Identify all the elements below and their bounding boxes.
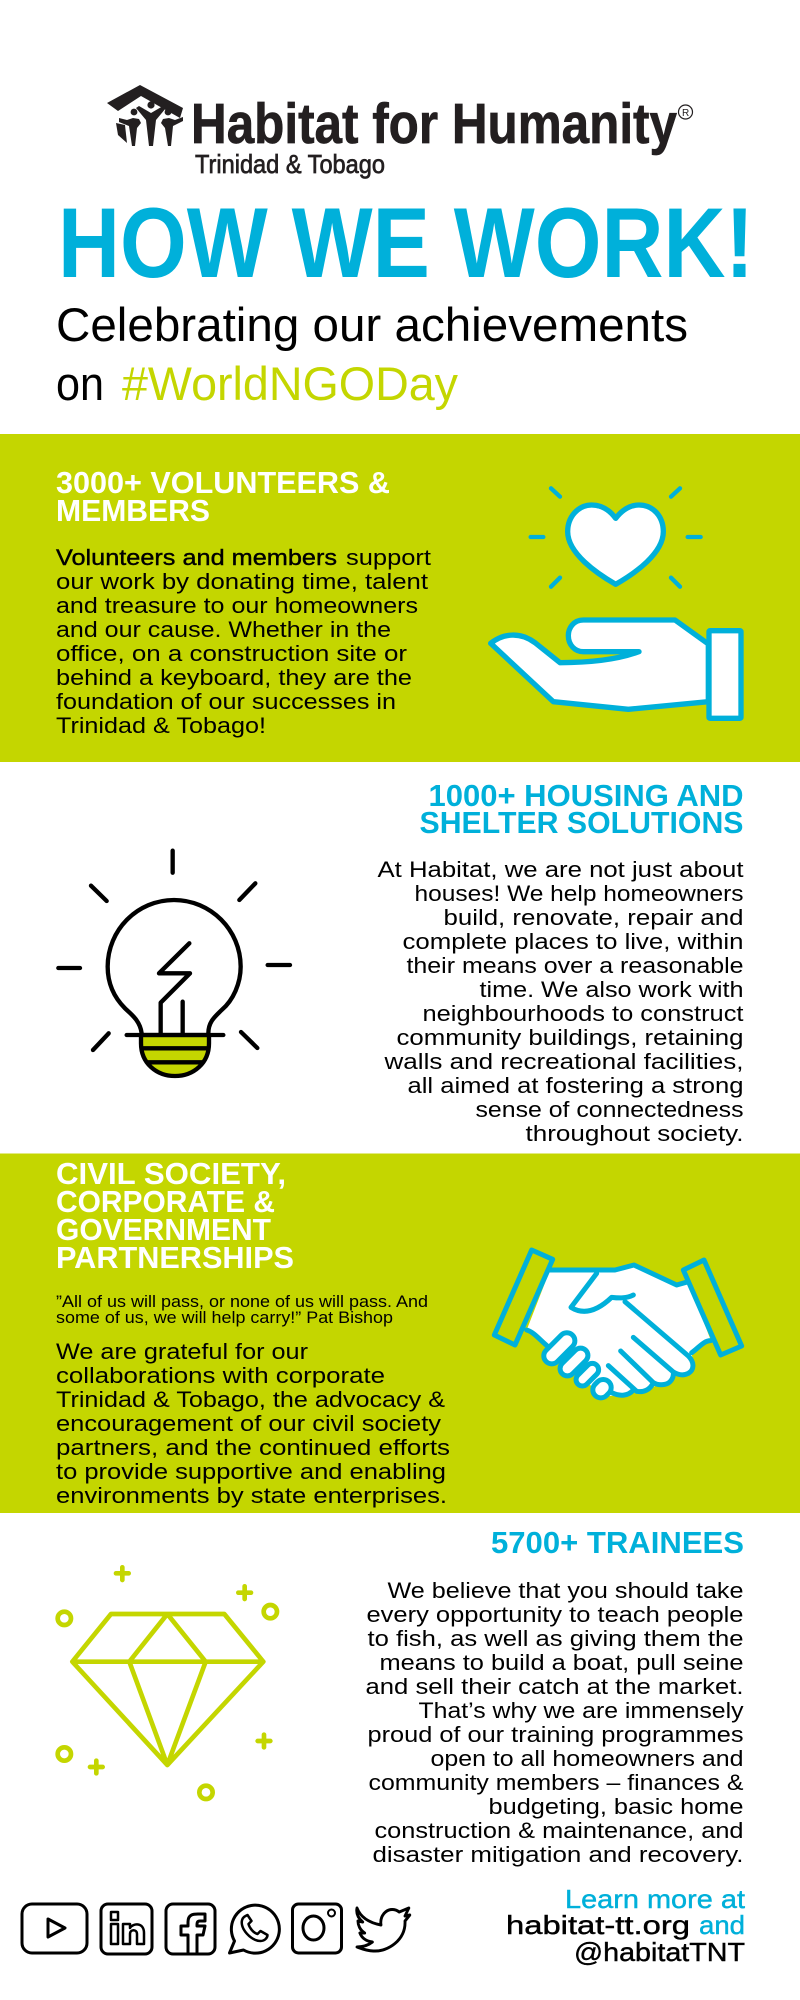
text block: trainees: every opportunity to teach people — [366, 1602, 744, 1627]
call to action: Learn more at — [565, 1884, 746, 1914]
heading: volunteers: MEMBERS — [56, 494, 210, 528]
text block: trainees: open to all homeowners and — [430, 1746, 744, 1771]
text block: partnerships: We are grateful for our — [56, 1339, 309, 1364]
icon: instagram — [292, 1904, 342, 1953]
heading: partnerships: PARTNERSHIPS — [56, 1241, 294, 1275]
icon: handshake — [494, 1250, 742, 1401]
heading: partnerships: CORPORATE & — [56, 1185, 275, 1219]
text block: volunteers: our work by donating time, talent — [56, 569, 429, 594]
text block: trainees: to fish, as well as giving them the — [368, 1626, 744, 1651]
icon: whatsapp — [230, 1905, 279, 1953]
text block: trainees: We believe that you should take — [388, 1578, 744, 1603]
text block: volunteers: foundation of our successes in — [56, 689, 396, 714]
text block: trainees: That’s why we are immensely — [418, 1698, 744, 1723]
text block: housing: neighbourhoods to construct — [422, 1001, 744, 1026]
text block: trainees: construction & maintenance, and — [374, 1818, 744, 1843]
call to action: and — [699, 1910, 745, 1940]
text block: volunteers: and our cause. Whether in the — [56, 617, 391, 642]
heading: housing — [420, 779, 744, 840]
panel: volunteers — [0, 434, 800, 762]
text block: housing: their means over a reasonable — [406, 953, 744, 978]
subtitle — [56, 298, 688, 410]
icon: facebook — [166, 1904, 215, 1954]
text block: housing: all aimed at fostering a strong — [408, 1073, 744, 1098]
text block: trainees: disaster mitigation and recovery. — [372, 1842, 744, 1867]
text block: partnerships: to provide supportive and enabling — [56, 1459, 446, 1484]
logo: Habitat for Humanity Trinidad & Tobago: R — [682, 108, 689, 119]
logo: Habitat for Humanity Trinidad & Tobago — [107, 85, 692, 179]
text block: partnerships: collaborations with corporate — [56, 1363, 385, 1388]
logo: Habitat for Humanity Trinidad & Tobago: Habitat for Humanity — [191, 92, 677, 156]
text block: housing: sense of connectedness — [476, 1097, 744, 1122]
text block: trainees: community members – finances & — [368, 1770, 744, 1795]
quote: some of us, we will help carry!” Pat Bishop — [56, 1308, 393, 1327]
panel: partnerships — [0, 1154, 800, 1513]
text block: volunteers: support — [346, 545, 432, 570]
text block: housing: throughout society. — [526, 1121, 744, 1146]
heading: partnerships — [56, 1157, 294, 1275]
icon: light bulb — [58, 851, 290, 1076]
text block: housing: At Habitat, we are not just about — [378, 857, 744, 882]
icon: house and people — [107, 85, 183, 146]
icon: diamond — [58, 1567, 277, 1799]
logo: Habitat for Humanity Trinidad & Tobago: Trinidad & Tobago — [195, 149, 385, 179]
quote: ”All of us will pass, or none of us will pass. And — [56, 1292, 428, 1311]
text block: housing: walls and recreational facilities, — [383, 1049, 744, 1074]
heading: partnerships: CIVIL SOCIETY, — [56, 1157, 286, 1191]
text block: partnerships: environments by state enterprises. — [56, 1483, 447, 1508]
text block: volunteers: office, on a construction site or — [56, 641, 408, 666]
text block: volunteers: Volunteers and members — [56, 545, 337, 570]
icon: youtube — [22, 1904, 87, 1953]
text block: housing: time. We also work with — [480, 977, 744, 1002]
icon: linkedin — [101, 1904, 152, 1954]
heading: volunteers — [56, 466, 390, 528]
heading: trainees: 5700+ TRAINEES — [491, 1526, 744, 1560]
text block: housing: houses! We help homeowners — [414, 881, 744, 906]
subtitle: #WorldNGODay — [122, 357, 458, 410]
text block: trainees: proud of our training programmes — [368, 1722, 744, 1747]
text block: trainees: and sell their catch at the market. — [366, 1674, 744, 1699]
text block: partnerships: Trinidad & Tobago, the advocacy & — [56, 1387, 445, 1412]
text block: housing: complete places to live, within — [402, 929, 744, 954]
quote — [56, 1292, 428, 1327]
text block: housing: community buildings, retaining — [396, 1025, 744, 1050]
icon: hand holding heart — [491, 488, 741, 718]
subtitle: on — [56, 357, 104, 410]
text block: partnerships: partners, and the continued efforts — [56, 1435, 450, 1460]
text block: volunteers — [56, 545, 432, 738]
text block: trainees: means to build a boat, pull seine — [380, 1650, 744, 1675]
text block: partnerships: encouragement of our civil society — [56, 1411, 442, 1436]
heading: housing: 1000+ HOUSING AND — [428, 779, 744, 813]
text block: trainees — [366, 1578, 744, 1867]
social icons — [22, 1904, 410, 1954]
icon: twitter — [357, 1908, 410, 1951]
subtitle: Celebrating our achievements — [56, 298, 688, 351]
text block: volunteers: Trinidad & Tobago! — [56, 713, 266, 738]
text block: volunteers: behind a keyboard, they are the — [56, 665, 412, 690]
heading: partnerships: GOVERNMENT — [56, 1213, 271, 1247]
text block: housing: build, renovate, repair and — [444, 905, 744, 930]
heading: housing: SHELTER SOLUTIONS — [420, 806, 744, 840]
text block: partnerships — [56, 1339, 450, 1508]
panel: trainees — [58, 1526, 744, 1867]
call to action: @habitatTNT — [574, 1937, 745, 1967]
panel: housing — [58, 779, 744, 1146]
call to action: habitat-tt.org — [506, 1910, 690, 1940]
call to action — [506, 1884, 746, 1967]
text block: trainees: budgeting, basic home — [488, 1794, 744, 1819]
heading: volunteers: 3000+ VOLUNTEERS & — [56, 466, 390, 500]
text block: volunteers: and treasure to our homeowners — [56, 593, 418, 618]
text block: housing — [378, 857, 744, 1146]
